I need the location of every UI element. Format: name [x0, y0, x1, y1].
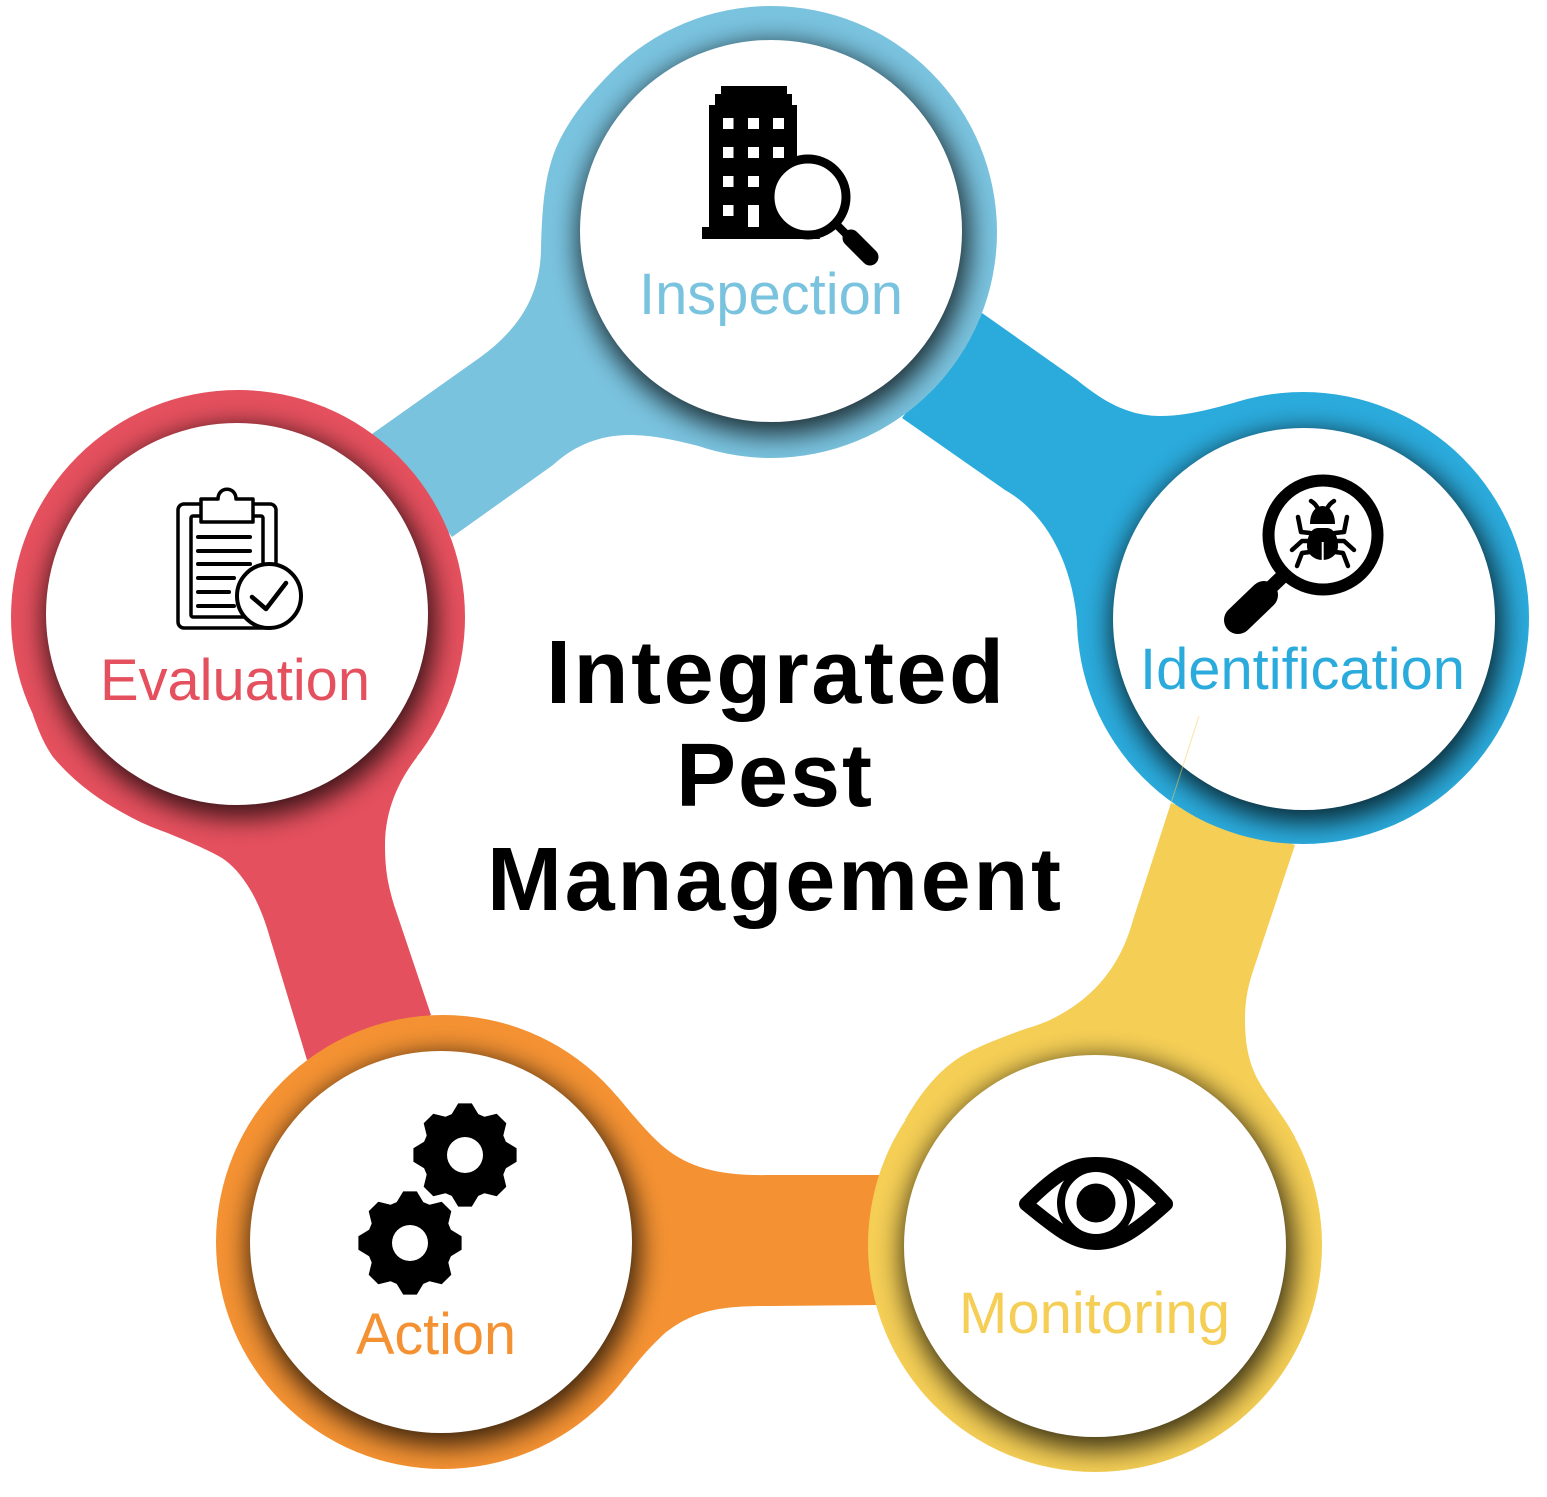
icon: building with magnifier: [702, 86, 870, 257]
label: Evaluation: Evaluation: [100, 648, 370, 713]
panel: evaluation: [11, 390, 465, 844]
title: Integrated Pest Management: Pest: [676, 726, 872, 826]
panel: action: [216, 1015, 670, 1469]
label: Monitoring: Monitoring: [959, 1281, 1230, 1346]
connector: evaluation to action: [33, 614, 431, 1060]
connector: inspection to evaluation: [372, 64, 771, 537]
connector: action to monitoring: [441, 1096, 880, 1378]
title: Integrated Pest Management: Integrated: [546, 623, 1004, 723]
icon: eye: [1026, 1164, 1166, 1243]
title: Integrated Pest Management: [487, 623, 1061, 930]
label: Identification: Identification: [1140, 637, 1465, 702]
panel: identification: [1077, 392, 1529, 844]
panel: monitoring: [868, 1018, 1322, 1472]
icon: clipboard with check: [178, 489, 301, 628]
icon: gears: [358, 1103, 517, 1295]
label: Action: Action: [356, 1302, 516, 1367]
label: Inspection: Inspection: [639, 262, 903, 327]
panel: inspection: [545, 6, 997, 458]
connector: identification to inspection: [902, 313, 1303, 640]
icon: magnifier with bug: [1238, 480, 1378, 620]
connector: monitoring to identification: [905, 803, 1295, 1245]
title: Integrated Pest Management: Management: [487, 830, 1061, 930]
